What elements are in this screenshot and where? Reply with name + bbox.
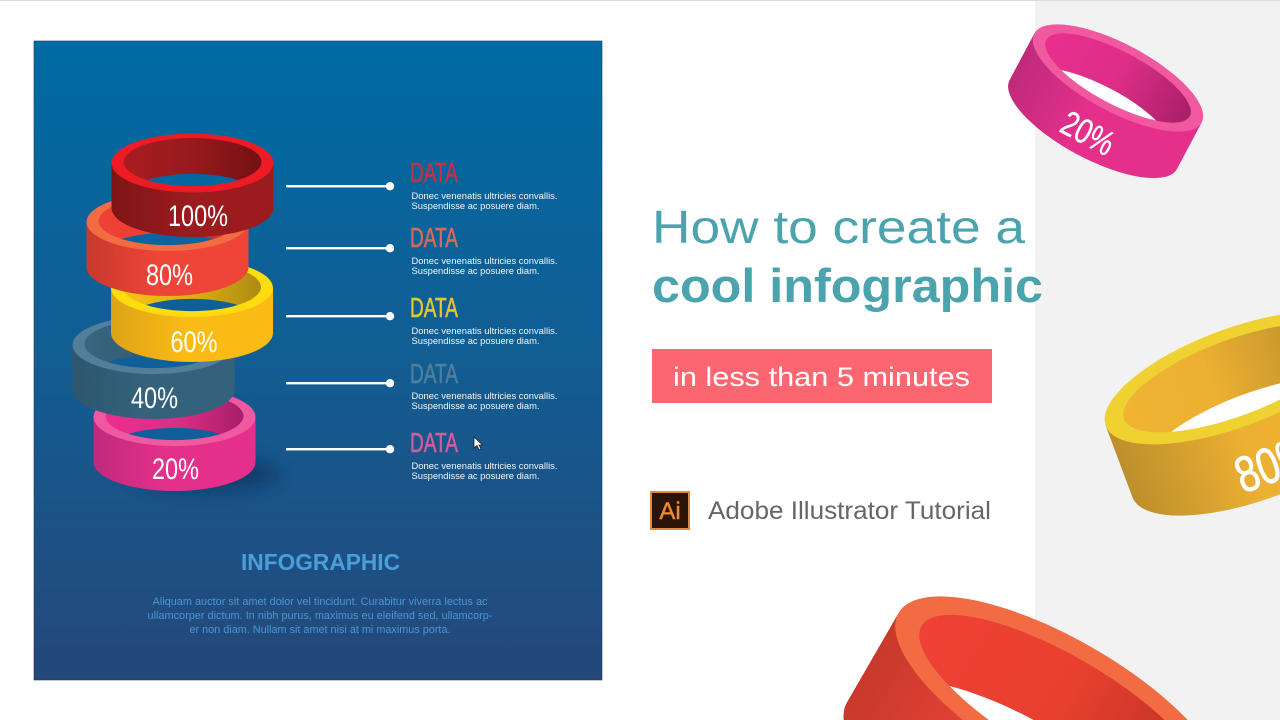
data label 2 [410,222,558,277]
ring: 40%: 40% [131,382,178,415]
data label 1: Donec venenatis ultricies convallis. [412,191,558,202]
connector line 1 [286,182,394,190]
data label 4: Donec venenatis ultricies convallis. [412,391,558,402]
icon: Adobe Illustrator: Ai [659,498,681,525]
ring: 100%: 100% [168,200,228,233]
poster paragraph: er non diam. Nullam sit amet nisi at mi maximus porta. [190,624,450,636]
data label 4: DATA [410,358,458,389]
data label 5 [410,427,558,482]
ring: 60%: 60% [170,326,218,359]
poster heading: INFOGRAPHIC [241,549,400,575]
data label 5: Suspendisse ac posuere diam. [412,471,540,482]
data label 4 [410,358,558,412]
connector line 3 [286,312,394,320]
data label 1: DATA [410,157,458,188]
icon: Adobe Illustrator [651,492,689,529]
background panel: grey right side [1035,0,1280,720]
ring: 100% [112,134,274,237]
connector line 2 [286,244,394,252]
data label 5: DATA [410,427,458,458]
ring: tilted pink 20% [994,4,1218,199]
ring: 40% [72,316,234,419]
poster paragraph: Aliquam auctor sit amet dolor vel tincidunt. Curabitur viverra lectus ac [152,596,488,608]
ring: 80% [86,193,248,296]
data label 3 [410,292,558,347]
icon: mouse cursor [474,437,482,450]
title line 1: How to create a [652,201,1025,253]
data label 2: DATA [410,222,458,253]
ring shadow [131,456,279,492]
data label 2: Donec venenatis ultricies convallis. [412,256,558,267]
ring: 80%: 80% [146,259,193,292]
poster paragraph [148,596,493,636]
poster paragraph: ullamcorper dictum. In nibh purus, maximus eu eleifend sed, ullamcorp- [148,610,493,622]
ring: 60% [111,259,273,362]
data label 3: Suspendisse ac posuere diam. [412,336,540,347]
title line 2: cool infographic [652,259,1043,312]
tutorial label: Adobe Illustrator Tutorial [708,497,991,525]
connector line 4 [286,379,394,387]
subtitle badge: in less than 5 minutes [673,362,970,392]
connector line 5 [286,445,394,453]
ring: 20% [94,388,256,491]
top edge line [0,0,1280,1]
panel: infographic poster [34,41,602,680]
data label 3: DATA [410,292,458,323]
data label 2: Suspendisse ac posuere diam. [412,266,540,277]
subtitle badge [652,349,992,403]
data label 3: Donec venenatis ultricies convallis. [412,326,558,337]
data label 1: Suspendisse ac posuere diam. [412,201,540,212]
data label 4: Suspendisse ac posuere diam. [412,401,540,412]
ring: tilted yellow 80% [1104,314,1280,516]
data label 5: Donec venenatis ultricies convallis. [412,461,558,472]
data label 1 [410,157,558,212]
ring: tilted red [844,596,1188,720]
ring: 20%: 20% [152,453,199,486]
ring: tilted pink 20%: 20% [1054,104,1121,164]
